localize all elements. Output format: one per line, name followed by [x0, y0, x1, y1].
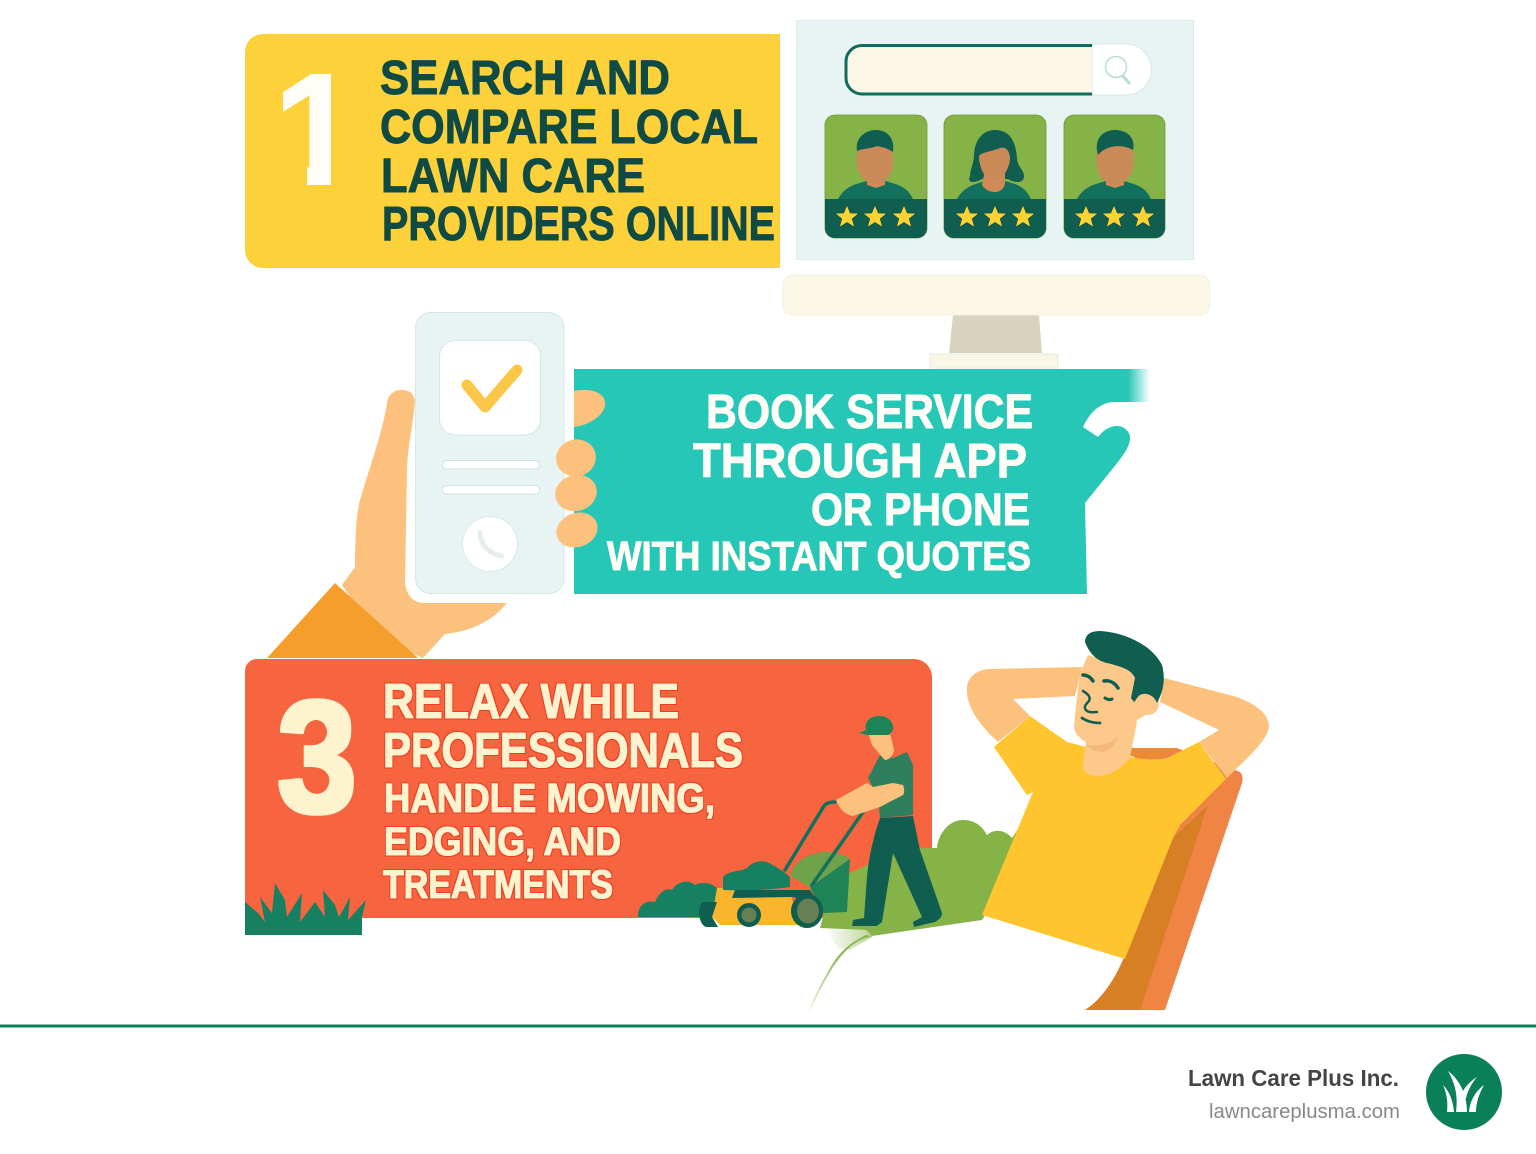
step 3 heading: TREATMENTS — [383, 863, 613, 907]
footer: company name: Lawn Care Plus Inc. — [1188, 1065, 1399, 1091]
step 3 heading — [383, 675, 743, 907]
face features — [1082, 675, 1118, 723]
step 2 heading — [607, 386, 1033, 579]
step 3 heading: EDGING, AND — [384, 820, 621, 864]
step 1 heading: LAWN CARE — [381, 150, 645, 203]
provider card 3 — [1064, 115, 1165, 238]
step 1 heading: COMPARE LOCAL — [380, 101, 758, 154]
footer: website: lawncareplusma.com — [1209, 1100, 1400, 1123]
right arm — [1160, 678, 1269, 778]
worker — [836, 716, 942, 927]
check mark — [467, 370, 517, 407]
chair — [1085, 748, 1243, 1010]
step number 3: 3 — [277, 667, 357, 846]
step 2 heading: THROUGH APP — [693, 435, 1027, 488]
sleeve — [267, 583, 418, 658]
call button — [462, 516, 518, 572]
step 1 heading: PROVIDERS ONLINE — [382, 198, 775, 251]
step 2 heading: BOOK SERVICE — [706, 386, 1033, 439]
panel: step 2 — [574, 369, 1150, 594]
illustration: desktop monitor — [783, 20, 1210, 368]
bush — [638, 882, 722, 917]
icon: company logo — [1426, 1054, 1502, 1130]
step 2 heading: OR PHONE — [811, 484, 1030, 535]
step 3 heading: HANDLE MOWING, — [384, 775, 715, 821]
grass bag — [790, 852, 850, 913]
panel: step 1 — [245, 34, 780, 268]
step 3 heading: RELAX WHILE — [383, 675, 679, 729]
fingers — [551, 390, 605, 553]
step 2 heading: WITH INSTANT QUOTES — [607, 533, 1031, 579]
mower — [699, 861, 823, 928]
footer divider — [0, 1024, 1536, 1028]
provider card 2 — [944, 115, 1046, 238]
illustration: hand holding phone — [267, 312, 605, 658]
provider card 1 — [825, 115, 927, 238]
mower handle — [785, 802, 863, 885]
neck — [1083, 722, 1137, 776]
step number 1: 1 — [273, 40, 362, 219]
panel: step 3 — [245, 659, 932, 935]
illustration: worker mowing lawn — [638, 716, 942, 928]
search bar — [846, 44, 1152, 95]
left arm — [967, 667, 1082, 742]
step 1 heading: SEARCH AND — [380, 52, 670, 105]
step 1 heading — [380, 52, 775, 251]
phone — [416, 312, 564, 594]
hand — [342, 390, 507, 658]
shirt — [982, 716, 1226, 959]
grass tuft — [245, 883, 366, 935]
monitor stand — [783, 275, 1210, 368]
illustration: relaxing man in chair — [967, 631, 1269, 1010]
illustration: lawn and bushes — [808, 820, 1040, 1015]
step 3 heading: PROFESSIONALS — [383, 724, 743, 778]
head — [1074, 631, 1164, 752]
